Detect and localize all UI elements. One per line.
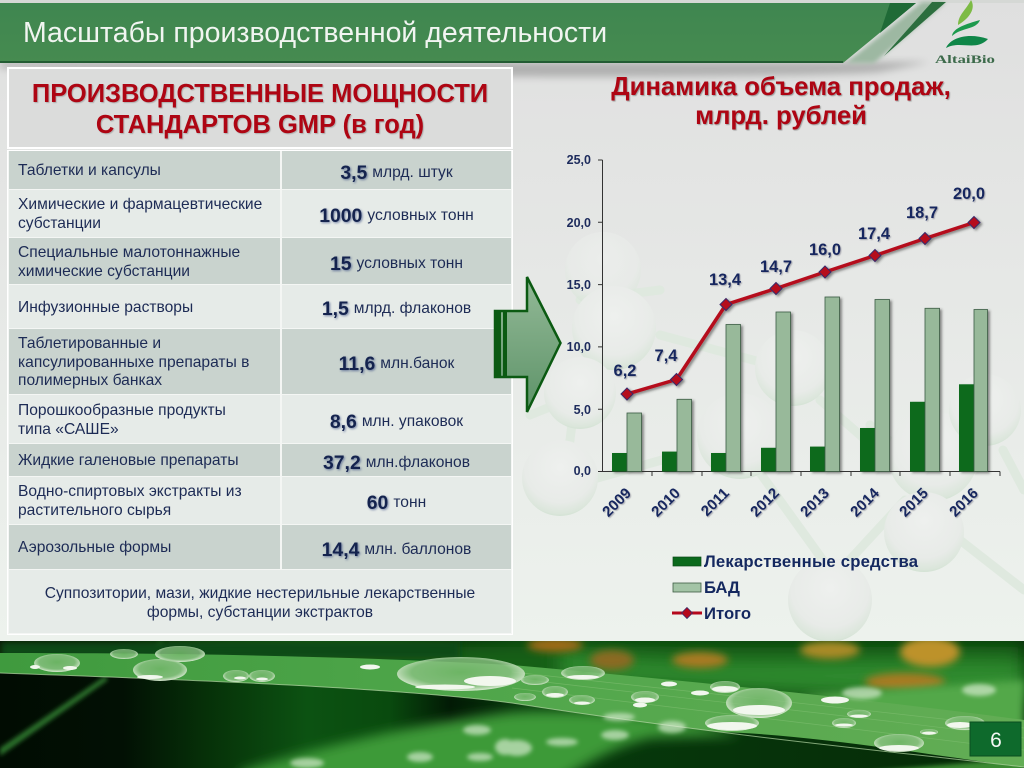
legend: Лекарственные средства (704, 552, 919, 571)
data labels (614, 185, 985, 380)
icon: AltaiBio logo (935, 0, 995, 66)
row: chemical substances (9, 190, 511, 237)
row: sachets: 8,6 (330, 411, 357, 433)
row: galenic: млн.флаконов (366, 454, 470, 471)
data labels: 17,4 (858, 225, 891, 243)
chart heading (611, 73, 951, 131)
data labels: 16,0 (809, 241, 841, 259)
year labels: 2009 (599, 485, 635, 520)
legend (672, 552, 919, 623)
row: infusions: млрд. флаконов (354, 300, 471, 317)
chart axes (598, 160, 1000, 476)
y axis labels: 10,0 (567, 340, 591, 354)
row: special substances: химические субстанции (18, 262, 190, 280)
legend: Итого (704, 604, 751, 623)
year labels: 2010 (648, 485, 684, 520)
row: extracts: тонн (393, 494, 426, 511)
row: infusions: 1,5 (322, 298, 349, 320)
line: total (621, 216, 980, 400)
y axis labels: 5,0 (574, 403, 591, 417)
y axis labels: 20,0 (567, 216, 591, 230)
year labels: 2016 (946, 485, 982, 520)
y axis labels: 15,0 (567, 278, 591, 292)
year labels: 2014 (847, 484, 883, 520)
row: tablets: 3,5 (340, 162, 367, 184)
y axis labels: 0,0 (574, 464, 591, 478)
page number (970, 722, 1021, 756)
year labels: 2015 (896, 485, 932, 520)
row: galenic: Жидкие галеновые препараты (18, 452, 239, 469)
row: special substances: Специальные малотоннажные (18, 244, 240, 261)
row: other forms: Суппозитории, мази, жидкие нестерильные лекарственные (45, 585, 475, 602)
bars: medicines (612, 384, 974, 472)
panel heading: СТАНДАРТОВ GMP (в год) (96, 111, 424, 139)
legend: БАД (704, 578, 740, 597)
icon: AltaiBio logo: AltaiBio (935, 52, 995, 66)
row: aerosols: млн. баллонов (364, 541, 471, 558)
data labels: 7,4 (655, 347, 678, 365)
row: chemical substances: субстанции (18, 215, 101, 232)
panel: production capacity table (8, 151, 512, 634)
data labels: 14,7 (760, 258, 792, 276)
year labels: 2011 (698, 485, 733, 520)
data labels: 18,7 (906, 204, 938, 222)
header green band (0, 0, 1024, 63)
row: infusions: Инфузионные растворы (18, 299, 193, 316)
chart heading: млрд. рублей (695, 102, 867, 130)
row: extracts: растительного сырья (18, 502, 171, 519)
row: tableted in polymer jars: Таблетированные и (18, 335, 161, 352)
row: tablets (9, 151, 511, 189)
row: chemical substances: условных тонн (367, 207, 474, 224)
year labels: 2012 (747, 485, 783, 520)
row: other forms (9, 570, 511, 633)
row: tableted in polymer jars: млн.банок (380, 355, 454, 372)
title: Масштабы производственной деятельности (23, 17, 607, 49)
chart heading: Динамика объема продаж, (611, 73, 951, 101)
row: sachets: млн. упаковок (362, 413, 463, 430)
year labels (599, 484, 982, 520)
panel heading (9, 69, 511, 147)
data labels: 20,0 (953, 185, 985, 203)
row: tableted in polymer jars: 11,6 (339, 353, 375, 375)
row: other forms: формы, субстанции экстрактов (147, 604, 373, 621)
panel heading: ПРОИЗВОДСТВЕННЫЕ МОЩНОСТИ (32, 80, 488, 108)
bar chart: sales dynamics (567, 153, 1000, 623)
row: extracts (9, 477, 511, 524)
y axis labels (567, 153, 591, 478)
row: sachets: Порошкообразные продукты (18, 402, 226, 419)
row: chemical substances: Химические и фармацевтические (18, 196, 262, 213)
row: aerosols: Аэрозольные формы (18, 539, 171, 556)
row: galenic (9, 444, 511, 476)
row: aerosols: 14,4 (322, 539, 359, 561)
row: sachets: типа «САШЕ» (18, 420, 119, 438)
molecule background (522, 232, 1024, 642)
row: extracts: Водно-спиртовых экстракты из (18, 483, 242, 500)
row: special substances (9, 238, 511, 284)
row: special substances: 15 (330, 253, 352, 275)
row: tableted in polymer jars: полимерных банках (18, 372, 162, 389)
y axis labels: 25,0 (567, 153, 591, 167)
row: sachets (9, 395, 511, 443)
row: chemical substances: 1000 (319, 205, 362, 227)
page number: 6 (990, 729, 1002, 752)
row: tableted in polymer jars: капсулированныхе препараты в (18, 354, 249, 371)
data labels: 6,2 (614, 362, 636, 380)
row: infusions (9, 285, 511, 328)
bars: dietary supplements (627, 297, 988, 472)
data labels: 13,4 (709, 271, 742, 289)
row: extracts: 60 (367, 492, 388, 514)
photo: leaf with dew drops (0, 637, 1024, 768)
row: aerosols (9, 525, 511, 569)
row: tablets: млрд. штук (372, 164, 453, 181)
row: tablets: Таблетки и капсулы (18, 162, 161, 179)
row: galenic: 37,2 (323, 452, 361, 474)
row: special substances: условных тонн (357, 255, 463, 272)
row: tableted in polymer jars (9, 329, 511, 394)
header shadow (0, 62, 930, 77)
year labels: 2013 (797, 485, 833, 520)
